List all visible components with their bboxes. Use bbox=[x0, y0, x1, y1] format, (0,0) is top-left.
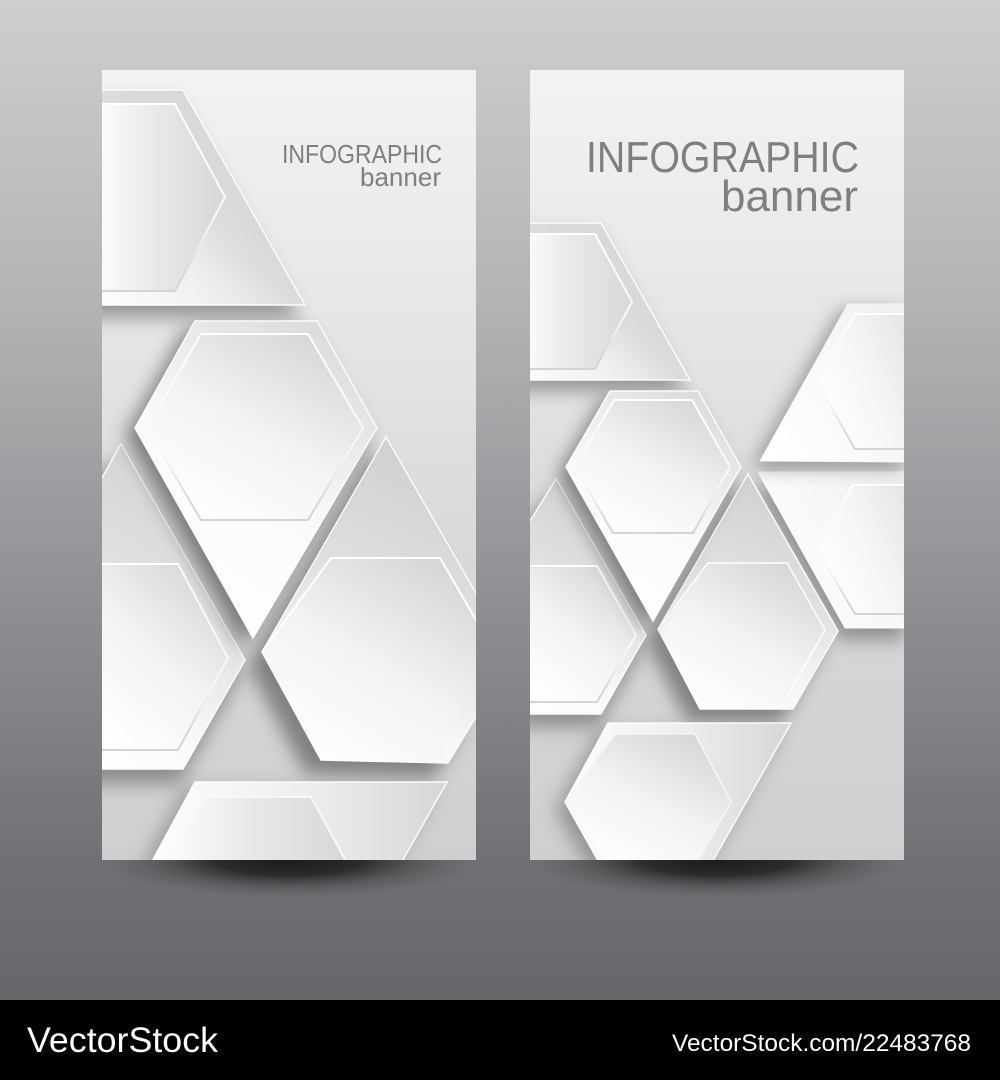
panel: right banner bbox=[515, 70, 910, 870]
watermark id text: VectorStock.com/22483768 bbox=[672, 1030, 971, 1057]
heading: left banner bbox=[282, 139, 442, 192]
heading: right banner bbox=[586, 133, 859, 221]
watermark logo text: VectorStock bbox=[27, 1021, 219, 1060]
shape: large centre hexagon with point bbox=[125, 321, 377, 648]
panel: left banner bbox=[84, 70, 480, 871]
shape: centre hexagon with triangle bbox=[646, 474, 838, 722]
shape: bottom triangle with hexagon bbox=[556, 723, 791, 870]
shape: bottom trapezoid with hexagon bbox=[140, 782, 447, 871]
shape: top left triangle with hexagon bbox=[515, 223, 690, 391]
shape: right middle hexagon bbox=[752, 472, 910, 640]
shape: left middle hexagon with triangle bbox=[517, 479, 646, 727]
heading: right banner: INFOGRAPHIC bbox=[586, 133, 859, 182]
shape: upper hexagon with point bbox=[558, 391, 741, 630]
footer bar bbox=[0, 1000, 1000, 1080]
shape: right top triangle with hexagon bbox=[752, 304, 910, 468]
shape: top left triangle with hexagon bbox=[84, 90, 305, 318]
shape: right hexagon with triangle bbox=[248, 437, 480, 777]
heading: left banner: INFOGRAPHIC bbox=[282, 139, 442, 169]
heading: left banner: banner bbox=[360, 162, 441, 192]
shadow under right banner bbox=[532, 822, 902, 898]
shape: left lower hexagon with triangle bbox=[86, 444, 245, 784]
heading: right banner: banner bbox=[721, 172, 858, 221]
shadow under left banner bbox=[104, 822, 474, 898]
